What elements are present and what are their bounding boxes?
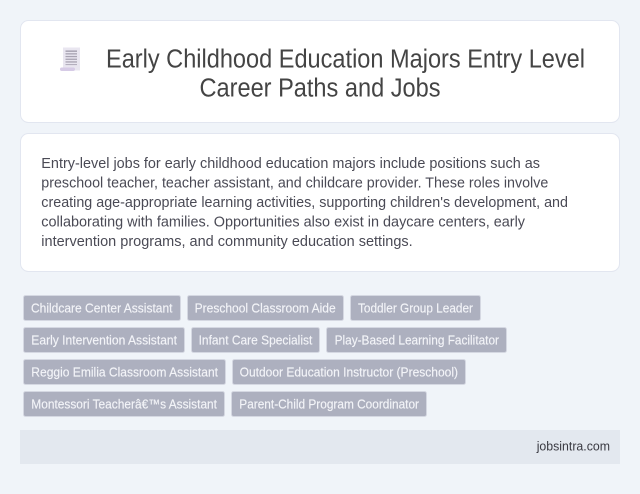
- text block: description: intervention programs, and community education settings.: [41, 233, 413, 250]
- tag: Childcare Center Assistant: Childcare Center Assistant: [31, 300, 173, 315]
- tag: Montessori Teacher's Assistant: [24, 392, 224, 416]
- icon: document scroll: [60, 48, 80, 71]
- tag list: [24, 296, 506, 416]
- tag: Infant Care Specialist: Infant Care Specialist: [199, 332, 313, 347]
- tag: Early Intervention Assistant: [24, 328, 184, 352]
- tag: Preschool Classroom Aide: Preschool Classroom Aide: [195, 300, 336, 315]
- footer source text: jobsintra.com: [536, 439, 610, 454]
- tag: Outdoor Education Instructor (Preschool): [232, 360, 466, 384]
- panel: description card: [20, 134, 620, 272]
- tag: Play-Based Learning Facilitator: [326, 328, 506, 352]
- title: Career Paths and Jobs: [200, 74, 440, 102]
- text block: description: creating age-appropriate learning activities, supporting children's development, and: [41, 194, 568, 211]
- tag: Reggio Emilia Classroom Assistant: Reggio Emilia Classroom Assistant: [31, 364, 218, 379]
- tag: Montessori Teacher's Assistant: Montessori Teacherâ€™s Assistant: [31, 396, 217, 411]
- tag: Reggio Emilia Classroom Assistant: [24, 360, 226, 384]
- text block: description: preschool teacher, teacher assistant, and childcare provider. These roles involve: [41, 175, 548, 192]
- footer bar: [20, 430, 620, 464]
- text block: description: Entry-level jobs for early childhood education majors include positions such as: [41, 155, 540, 172]
- tag: Outdoor Education Instructor (Preschool): Outdoor Education Instructor (Preschool): [240, 364, 458, 379]
- title: [106, 46, 585, 102]
- tag: Toddler Group Leader: [350, 296, 480, 320]
- tag: Infant Care Specialist: [192, 328, 320, 352]
- tag: Parent-Child Program Coordinator: [232, 392, 426, 416]
- tag: Early Intervention Assistant: Early Intervention Assistant: [31, 332, 177, 347]
- text block: description: [41, 155, 568, 250]
- panel: title card: [20, 20, 620, 122]
- title: Early Childhood Education Majors Entry Level: [106, 46, 585, 74]
- text block: description: collaborating with families. Opportunities also exist in daycare centers, early: [41, 214, 525, 231]
- tag: Play-Based Learning Facilitator: Play-Based Learning Facilitator: [335, 332, 500, 347]
- tag: Toddler Group Leader: Toddler Group Leader: [358, 300, 474, 315]
- tag: Parent-Child Program Coordinator: Parent-Child Program Coordinator: [239, 396, 420, 411]
- tag: Childcare Center Assistant: [24, 296, 180, 320]
- tag: Preschool Classroom Aide: [188, 296, 344, 320]
